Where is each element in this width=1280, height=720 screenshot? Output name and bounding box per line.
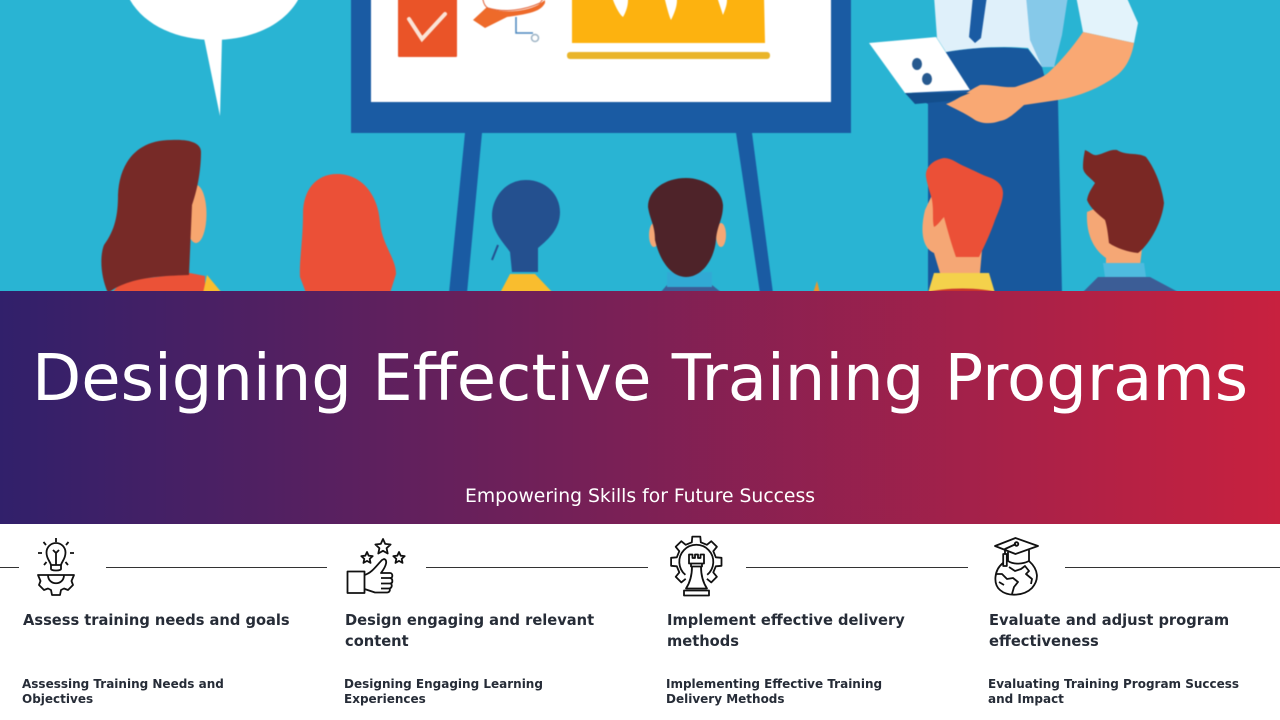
audience member: brown hair man (1082, 150, 1180, 293)
audience member: dark curly hair (648, 178, 726, 293)
text: assessing: Assessing Training Needs and (22, 677, 224, 691)
title: Designing Effective Training Programs (32, 342, 1248, 416)
text: implementing: Implementing Effective Training (666, 677, 882, 691)
text: evaluating (988, 677, 1239, 706)
icon: thumbs up with stars (346, 538, 406, 594)
heading: implement: Implement effective delivery (667, 612, 905, 629)
heading: evaluate: effectiveness (989, 633, 1099, 650)
presentation board (351, 0, 851, 293)
text: assessing: Objectives (22, 692, 93, 706)
text: designing: Designing Engaging Learning (344, 677, 543, 691)
icon: graduation cap on globe (994, 537, 1039, 596)
text: implementing (666, 677, 882, 706)
heading: implement (667, 612, 905, 650)
heading: assess: Assess training needs and goals (23, 612, 290, 629)
text: designing (344, 677, 543, 706)
presenter (869, 0, 1138, 293)
text: evaluating: Evaluating Training Program Success (988, 677, 1239, 691)
small yellow object (813, 281, 820, 293)
illustration: trainer presenting to audience (0, 0, 1280, 291)
banner (0, 291, 1280, 524)
audience member: orange hair man (922, 158, 1003, 293)
text: assessing (22, 677, 224, 706)
heading: implement: methods (667, 633, 739, 650)
audience member: woman with long brown hair (101, 140, 222, 293)
speech bubble (130, 0, 298, 116)
icon: chess rook in gear (670, 536, 722, 596)
audience member: woman with orange hair (300, 174, 396, 293)
heading: design (345, 612, 594, 650)
heading: design: content (345, 633, 409, 650)
subtitle: Empowering Skills for Future Success (465, 486, 815, 507)
text: implementing: Delivery Methods (666, 692, 785, 706)
text: evaluating: and Impact (988, 692, 1064, 706)
audience member: navy hair (492, 180, 560, 293)
icon: lightbulb and gear (37, 538, 75, 596)
heading: evaluate: Evaluate and adjust program (989, 612, 1229, 629)
heading: evaluate (989, 612, 1229, 650)
text: designing: Experiences (344, 692, 426, 706)
heading: design: Design engaging and relevant (345, 612, 594, 629)
